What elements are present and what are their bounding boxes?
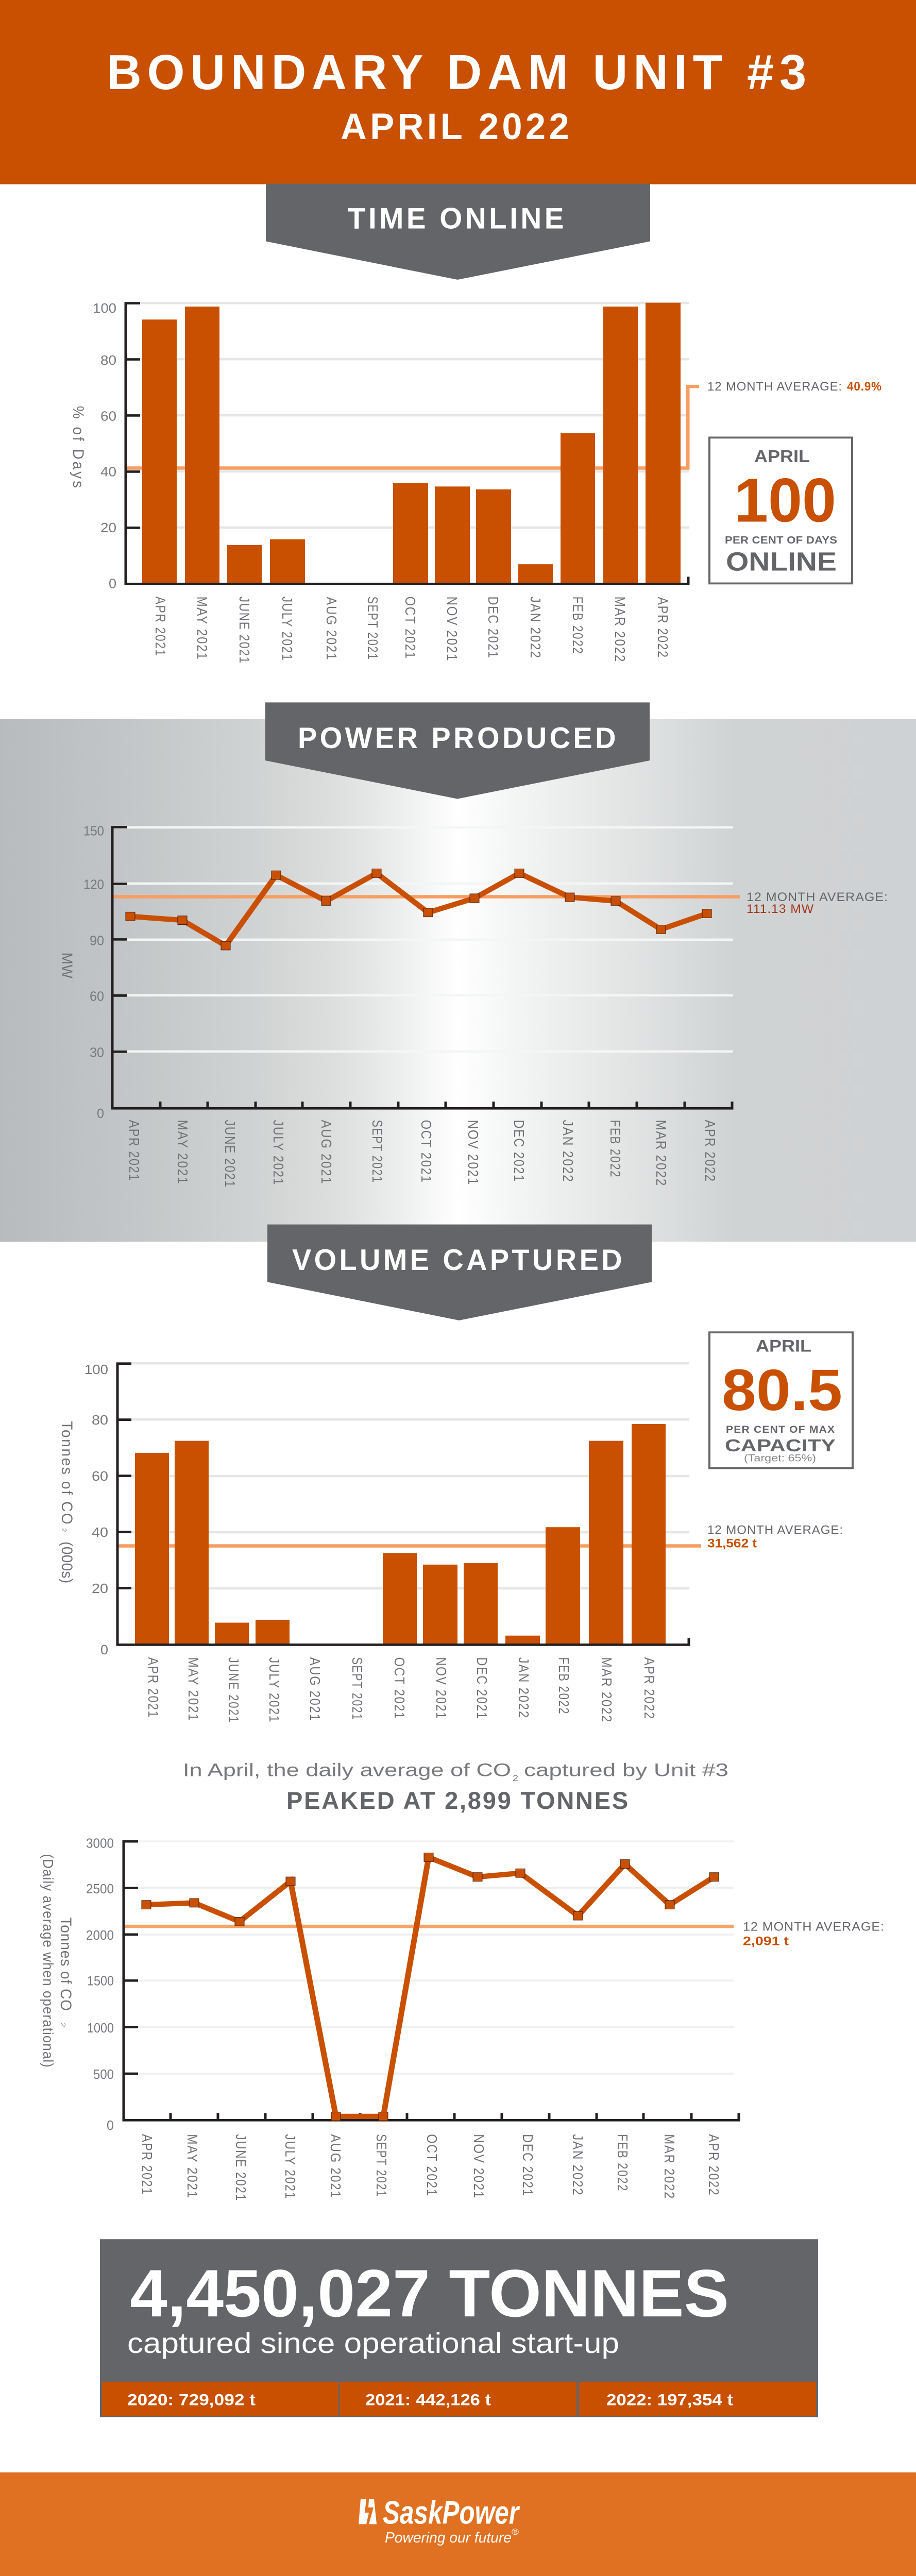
bar chart: time online: APR 2021: [152, 597, 168, 657]
line chart: daily average co2: 0: [107, 2118, 114, 2133]
bar chart: volume captured: 60: [92, 1469, 108, 1484]
bar chart: time online: OCT 2021: [402, 597, 418, 659]
bar chart: volume captured: MAR 2022: [599, 1657, 615, 1723]
line chart: daily average co2: APR 2021: [139, 2134, 155, 2195]
callout: 12 month average daily: 2,091 t: [743, 1934, 789, 1948]
line chart: daily average co2: [40, 1836, 739, 2201]
line chart: power produced: 90: [90, 933, 104, 948]
yearly totals: [102, 2382, 816, 2416]
bar chart: time online: AUG 2021: [324, 597, 340, 660]
bar chart: time online: JAN 2022: [528, 597, 544, 659]
bar chart: time online: FEB 2022: [570, 597, 586, 654]
bar chart: volume captured: JULY 2021: [266, 1657, 282, 1723]
section heading: time online: [266, 184, 650, 280]
bar chart: time online: APR 2022: [655, 597, 671, 658]
heading: peaked at 2,899 tonnes: PEAKED AT 2,899 TONNES: [286, 1787, 630, 1814]
bar chart: volume captured: 20: [92, 1581, 108, 1596]
stat box: april 100 per cent online: APRIL: [754, 447, 810, 466]
bar chart: volume captured: 40: [92, 1525, 108, 1540]
section heading: power produced: [265, 702, 650, 799]
line chart: power produced: MAR 2022: [653, 1120, 669, 1187]
section heading: volume captured: VOLUME CAPTURED: [292, 1243, 625, 1277]
intro text: daily average: 2: [513, 1773, 518, 1783]
line chart: power produced: DEC 2021: [511, 1120, 527, 1182]
panel: power produced background: [0, 719, 916, 1242]
line chart: daily average co2: JAN 2022: [570, 2134, 586, 2196]
line chart: power produced: JAN 2022: [560, 1120, 576, 1183]
stat box: april 80.5 per cent of capacity: (Target: 65%): [744, 1453, 816, 1464]
bar chart: time online: SEPT 2021: [365, 597, 381, 660]
callout: 12 month average power: [747, 890, 888, 916]
line chart: daily average co2: AUG 2021: [328, 2134, 344, 2198]
bar chart: time online: 80: [100, 353, 116, 368]
intro text: daily average: [183, 1760, 728, 1783]
callout: 12 month average volume: 12 MONTH AVERAGE:: [707, 1523, 843, 1537]
tagline: Powering our future: [385, 2530, 512, 2546]
bar chart: volume captured: FEB 2022: [556, 1657, 572, 1715]
line chart: power produced: 30: [90, 1045, 104, 1060]
bar chart: time online: JULY 2021: [279, 597, 295, 661]
section heading: power produced: POWER PRODUCED: [298, 721, 619, 754]
section heading: time online: TIME ONLINE: [348, 201, 567, 235]
bar chart: volume captured: SEPT 2021: [349, 1657, 365, 1721]
stat box: april 80.5 per cent of capacity: 80.5: [722, 1357, 842, 1422]
bar chart: volume captured: 100: [84, 1362, 108, 1377]
bar chart: volume captured: AUG 2021: [307, 1657, 323, 1721]
line chart: power produced: APR 2022: [702, 1120, 718, 1182]
line chart: power produced: APR 2021: [126, 1120, 142, 1181]
bar chart: volume captured: 0: [100, 1642, 108, 1657]
line chart: power produced: NOV 2021: [465, 1120, 481, 1185]
stat box: april 80.5 per cent of capacity: PER CENT OF MAX: [726, 1424, 835, 1435]
line chart: power produced: 0: [97, 1106, 104, 1121]
line chart: daily average co2: NOV 2021: [471, 2134, 487, 2199]
panel: total tonnes captured: [100, 2239, 818, 2417]
intro text: daily average: captured by Unit #3: [524, 1760, 728, 1780]
icon: saskpower logo mark: [359, 2499, 377, 2524]
bar chart: volume captured: NOV 2021: [433, 1657, 449, 1720]
line chart: daily average co2: JUNE 2021: [233, 2134, 249, 2201]
callout: 12 month average time online: 40.9%: [847, 380, 882, 394]
line chart: power produced: [58, 823, 740, 1188]
bar chart: volume captured: 80: [92, 1413, 108, 1428]
bar chart: time online: 100: [93, 301, 116, 316]
line chart: daily average co2: FEB 2022: [615, 2134, 631, 2192]
line chart: daily average co2: 1500: [87, 1973, 114, 1988]
yearly totals: 2021: 442,126 t: [365, 2391, 491, 2409]
stat box: april 80.5 per cent of capacity: [709, 1332, 853, 1468]
registered mark: ®: [512, 2527, 519, 2537]
line chart: power produced: MW: [58, 953, 75, 978]
line chart: power produced: 60: [90, 989, 104, 1004]
intro text: daily average: In April, the daily average of CO: [183, 1760, 511, 1780]
bar chart: time online: DEC 2021: [485, 597, 501, 659]
caption: captured since operational start-up: [127, 2328, 619, 2359]
yearly totals: 2020: 729,092 t: [127, 2391, 256, 2409]
line chart: daily average co2: SEPT 2021: [374, 2134, 389, 2197]
bar chart: volume captured: APR 2022: [641, 1657, 657, 1720]
line chart: daily average co2: 2500: [86, 1882, 114, 1896]
line chart: power produced: AUG 2021: [318, 1120, 334, 1184]
bar chart: time online: 40: [100, 465, 116, 480]
line chart: daily average co2: 500: [93, 2067, 114, 2082]
section heading: volume captured: [267, 1225, 652, 1320]
stat box: april 100 per cent online: PER CENT OF DAYS: [725, 534, 837, 546]
bar chart: time online: NOV 2021: [444, 597, 460, 662]
line chart: daily average co2: (Daily average when operational): [40, 1854, 56, 2067]
line chart: daily average co2: 3000: [86, 1836, 114, 1851]
bar chart: time online: 20: [100, 520, 116, 535]
stat box: april 100 per cent online: [709, 437, 852, 583]
callout: 12 month average power: 111.13 MW: [747, 902, 814, 916]
line chart: power produced: JUNE 2021: [222, 1120, 238, 1188]
stat box: april 100 per cent online: 100: [734, 465, 836, 535]
bar chart: volume captured: 2: [60, 1528, 67, 1532]
big number: 4,450,027 TONNES: [130, 2256, 729, 2331]
bar chart: volume captured: APR 2021: [145, 1657, 161, 1718]
yearly totals: 2022: 197,354 t: [606, 2391, 733, 2409]
line chart: power produced: SEPT 2021: [369, 1120, 385, 1183]
bar chart: time online: MAR 2022: [612, 597, 628, 663]
callout: 12 month average volume: [707, 1523, 843, 1550]
bar chart: volume captured: OCT 2021: [392, 1657, 408, 1720]
subtitle: APRIL 2022: [341, 106, 572, 147]
bar chart: time online: 0: [109, 577, 116, 591]
bar chart: time online: JUNE 2021: [236, 597, 252, 664]
title: BOUNDARY DAM UNIT #3: [107, 45, 812, 100]
stat box: april 100 per cent online: ONLINE: [726, 547, 837, 577]
line chart: power produced: FEB 2022: [607, 1120, 623, 1178]
line chart: daily average co2: MAY 2021: [184, 2134, 200, 2199]
line chart: daily average co2: Tonnes of CO: [57, 1917, 74, 2011]
bar chart: time online: MAY 2021: [194, 597, 210, 660]
bar chart: volume captured: DEC 2021: [474, 1657, 490, 1720]
line chart: power produced: OCT 2021: [418, 1120, 434, 1183]
line chart: power produced: MAY 2021: [175, 1120, 191, 1184]
line chart: daily average co2: 1000: [87, 2021, 114, 2036]
line chart: daily average co2: 2000: [86, 1928, 114, 1943]
footer banner: [0, 2472, 916, 2576]
line chart: power produced: JULY 2021: [270, 1120, 286, 1185]
bar chart: time online: 60: [100, 409, 116, 424]
line chart: daily average co2: APR 2022: [706, 2134, 722, 2196]
line chart: daily average co2: DEC 2021: [520, 2134, 536, 2196]
line chart: power produced: 150: [83, 823, 104, 838]
bar chart: volume captured: MAY 2021: [185, 1657, 201, 1721]
line chart: daily average co2: 2: [59, 2023, 66, 2027]
logo wordmark: SaskPower: [383, 2495, 520, 2531]
bar chart: time online: [70, 301, 699, 664]
bar chart: volume captured: Tonnes of CO: [58, 1421, 75, 1524]
line chart: daily average co2: OCT 2021: [424, 2134, 440, 2196]
callout: 12 month average daily: 12 MONTH AVERAGE:: [743, 1920, 885, 1934]
stat box: april 80.5 per cent of capacity: APRIL: [756, 1336, 811, 1355]
line chart: daily average co2: JULY 2021: [282, 2134, 298, 2199]
callout: 12 month average time online: 12 MONTH AVERAGE:: [707, 380, 842, 394]
callout: 12 month average daily: [743, 1920, 885, 1948]
line chart: power produced: 120: [83, 877, 104, 892]
line chart: daily average co2: MAR 2022: [661, 2134, 677, 2199]
stat box: april 80.5 per cent of capacity: CAPACITY: [725, 1436, 836, 1455]
bar chart: volume captured: JUNE 2021: [226, 1657, 242, 1723]
header banner: [0, 0, 916, 184]
callout: 12 month average volume: 31,562 t: [707, 1536, 757, 1550]
bar chart: volume captured: JAN 2022: [516, 1657, 532, 1719]
bar chart: volume captured: [58, 1362, 701, 1723]
bar chart: volume captured: (000s): [58, 1541, 75, 1583]
callout: 12 month average power: 12 MONTH AVERAGE:: [747, 890, 888, 904]
bar chart: time online: % of Days: [70, 406, 87, 488]
